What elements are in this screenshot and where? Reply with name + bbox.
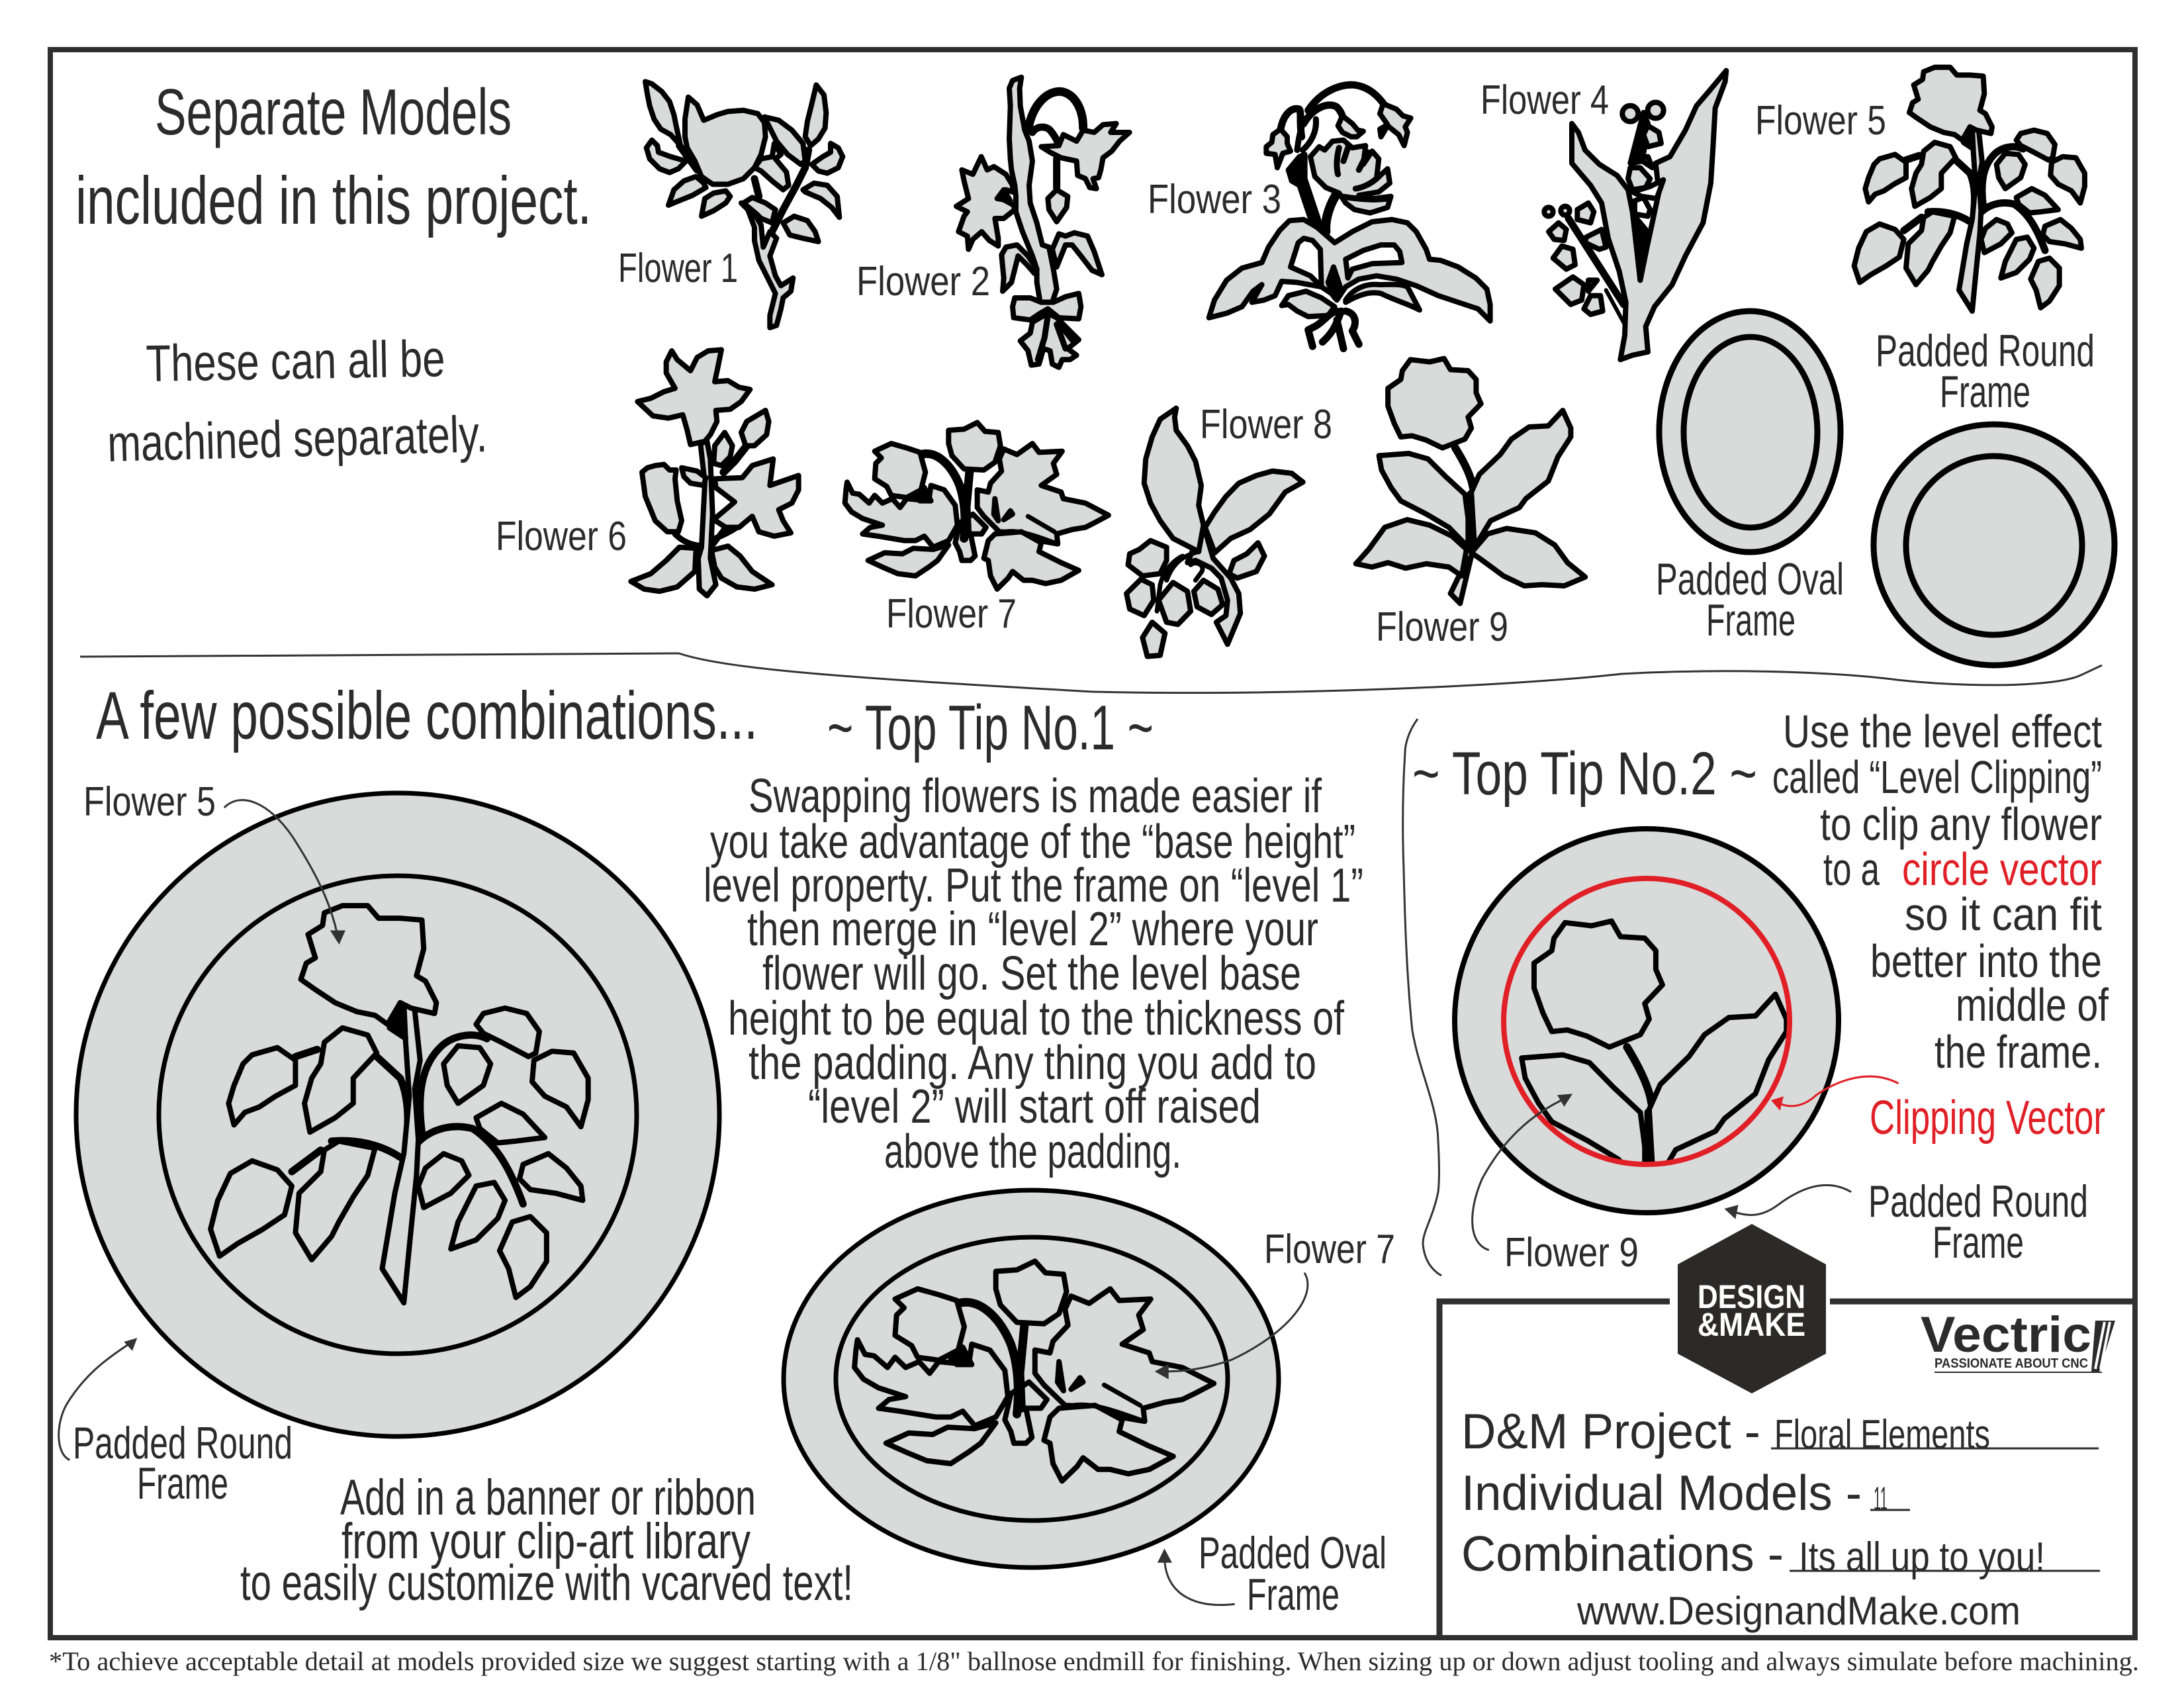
- combination: oval frame with flower 7: [784, 1190, 1279, 1568]
- heading: separate models: included in this project.: [75, 163, 592, 238]
- project details: [1461, 1403, 2100, 1633]
- label: flower 7 callout: Flower 7: [1264, 1227, 1395, 1272]
- text: top tip 2 body: better into the: [1870, 935, 2102, 987]
- text: top tip 2 body: to a: [1823, 843, 1880, 895]
- logo: vectric: PASSIONATE ABOUT CNC: [1934, 1356, 2088, 1371]
- project details: www.DesignandMake.com: [1576, 1589, 2021, 1633]
- text: machined separately: These can all be: [146, 329, 445, 393]
- flower 2: [956, 77, 1130, 367]
- text: top tip 2 body: middle of: [1956, 979, 2109, 1031]
- combination: round frame with clipped flower 9: [1455, 829, 1839, 1266]
- text: top tip 1 body: height to be equal to the thickness of: [728, 992, 1345, 1045]
- label: flower 7 callout: [1155, 1227, 1395, 1380]
- label: padded oval frame callout: [1158, 1528, 1387, 1620]
- logo: design and make hexagon: DESIGN: [1698, 1278, 1805, 1315]
- label: padded round frame callout 2: [1724, 1176, 2088, 1268]
- label: flower 7: Flower 7: [886, 591, 1017, 637]
- label: clipping vector callout: [1771, 1076, 2105, 1145]
- label: padded round frame callout: Padded Round: [73, 1418, 293, 1468]
- label: padded round frame callout: [59, 1338, 293, 1509]
- label: flower 4: Flower 4: [1480, 77, 1609, 123]
- label: clipping vector callout: Clipping Vector: [1870, 1092, 2105, 1145]
- text: top tip 1 body: then merge in “level 2” where your: [747, 903, 1318, 956]
- label: flower 6: Flower 6: [496, 514, 627, 559]
- logo: design and make hexagon: &MAKE: [1698, 1306, 1805, 1343]
- label: padded oval frame: [1656, 554, 1844, 645]
- flower 3: [1209, 85, 1490, 349]
- heading: separate models: [75, 75, 592, 238]
- label: flower 2: Flower 2: [856, 259, 990, 305]
- text: top tip 1 body: above the padding.: [884, 1125, 1181, 1178]
- text: banner tip: from your clip-art library: [341, 1513, 751, 1570]
- label: padded round frame: Frame: [1940, 367, 2030, 417]
- text: machined separately: [107, 329, 488, 473]
- text: banner tip: to easily customize with vcarved text!: [240, 1555, 853, 1611]
- footer note: *To achieve acceptable detail at models provided size we suggest starting with a 1/8" ballnose endmill for finishing. When sizing up or down adjust tooling and always simulate before machining.: [49, 1646, 2139, 1676]
- text: top tip 2 body: to clip any flower: [1820, 798, 2102, 850]
- label: padded round frame: [1876, 326, 2095, 417]
- label: padded round frame callout 2: Padded Round: [1868, 1176, 2088, 1227]
- text: top tip 2 body: Use the level effect: [1783, 706, 2102, 757]
- text: top tip 1 body: [704, 770, 1363, 1178]
- text: top tip 2 body: the frame.: [1934, 1026, 2102, 1078]
- label: flower 8: Flower 8: [1200, 402, 1332, 447]
- project details: Individual Models -: [1461, 1465, 1862, 1521]
- logo: vectric: Vectric: [1921, 1307, 2091, 1363]
- flower 4: [1544, 71, 1726, 359]
- project details: 11: [1874, 1480, 1888, 1517]
- text: top tip 2 body: circle vector: [1902, 843, 2102, 895]
- text: machined separately: machined separately.: [107, 404, 488, 473]
- label: flower 9 callout: Flower 9: [1504, 1230, 1639, 1276]
- logo: design and make hexagon: [1678, 1224, 1826, 1393]
- label: padded oval frame: Frame: [1706, 595, 1796, 645]
- padded round frame model: [1874, 424, 2115, 665]
- flower 8: [1126, 408, 1303, 657]
- text: top tip 2 body: so it can fit: [1905, 888, 2102, 940]
- label: flower 1: Flower 1: [618, 246, 738, 291]
- text: banner tip: Add in a banner or ribbon: [340, 1470, 756, 1526]
- combination: big round frame with flower 5: [76, 793, 719, 1436]
- project details: Combinations -: [1461, 1526, 1784, 1581]
- text: top tip 1 body: Swapping flowers is made easier if: [749, 770, 1322, 823]
- text: banner tip: [240, 1470, 853, 1611]
- label: flower 5 callout: [83, 779, 345, 945]
- label: padded oval frame callout: Frame: [1247, 1570, 1340, 1620]
- label: flower 3: Flower 3: [1148, 177, 1281, 222]
- label: padded oval frame callout: Padded Oval: [1199, 1528, 1387, 1578]
- label: padded round frame: Padded Round: [1876, 326, 2095, 376]
- flower 9: [1356, 359, 1585, 604]
- text: top tip 1 body: flower will go. Set the level base: [762, 947, 1301, 1000]
- padded oval frame model: [1659, 311, 1841, 552]
- label: flower 9: Flower 9: [1376, 604, 1508, 650]
- label: padded round frame callout: Frame: [137, 1458, 228, 1509]
- info box: [1439, 1224, 2135, 1638]
- text: top tip 2 body: [1772, 706, 2109, 1078]
- project details: Floral Elements: [1774, 1412, 1990, 1458]
- flower 5: [1854, 68, 2085, 311]
- label: flower 5 callout: Flower 5: [83, 779, 216, 825]
- label: padded oval frame: Padded Oval: [1656, 554, 1844, 604]
- flower 7: [845, 422, 1109, 589]
- heading: top tip 1: ~ Top Tip No.1 ~: [827, 692, 1154, 763]
- flower 6: [631, 350, 799, 596]
- project details: Its all up to you!: [1799, 1534, 2045, 1580]
- text: top tip 1 body: level property. Put the frame on “level 1”: [704, 859, 1363, 912]
- flower 1: [645, 81, 842, 328]
- label: padded round frame callout 2: Frame: [1933, 1217, 2024, 1268]
- project details: D&M Project -: [1461, 1403, 1760, 1459]
- text: top tip 1 body: the padding. Any thing you add to: [749, 1037, 1316, 1090]
- heading: separate models: Separate Models: [155, 75, 512, 148]
- text: top tip 1 body: you take advantage of the “base height”: [710, 816, 1355, 868]
- label: flower 5: Flower 5: [1755, 98, 1886, 144]
- label: flower 9 callout: [1473, 1094, 1639, 1276]
- heading: a few possible combinations: A few possible combinations...: [96, 678, 758, 753]
- text: top tip 1 body: “level 2” will start off raised: [808, 1080, 1261, 1133]
- heading: top tip 2: ~ Top Tip No.2 ~: [1412, 740, 1757, 808]
